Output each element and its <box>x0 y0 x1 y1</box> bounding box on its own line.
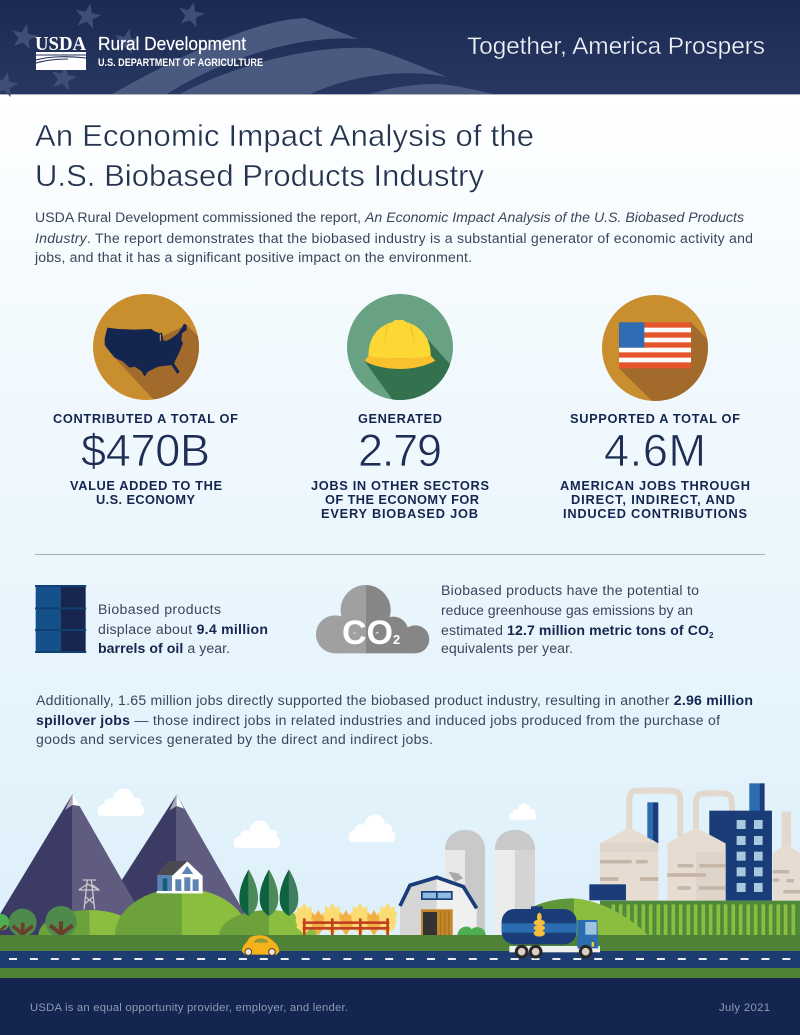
stat: 4.6M: AMERICAN JOBS THROUGH <box>560 478 750 493</box>
stat: $470B: $470B <box>81 425 210 476</box>
jobs paragraph: Additionally, 1.65 million jobs directly supported the biobased product industry, resulting in another 2.96 million <box>36 692 753 708</box>
oil displacement text <box>98 601 268 656</box>
mountains and hills <box>0 794 398 967</box>
barn <box>400 877 477 935</box>
icon: US map in orange circle <box>93 294 199 400</box>
icon: CO2 cloud: 2 <box>393 632 400 647</box>
greenhouse gas text: estimated 12.7 million metric tons of CO <box>441 622 709 638</box>
intro paragraph <box>34 209 753 265</box>
intro paragraph: jobs, and that it has a significant positive impact on the environment. <box>34 249 472 265</box>
agency name: Rural Development <box>98 33 246 54</box>
stat: 2.79: JOBS IN OTHER SECTORS <box>311 478 489 493</box>
stat: 4.6M: SUPPORTED A TOTAL OF <box>570 411 740 426</box>
stat: 2.79: 2.79 <box>358 425 442 476</box>
stat: 2.79: OF THE ECONOMY FOR <box>325 492 479 507</box>
stat: 2.79: GENERATED <box>358 411 442 426</box>
USDA logo <box>35 33 86 70</box>
jobs paragraph: spillover jobs — those indirect jobs in related industries and induced jobs produced from the purchase of <box>36 712 720 728</box>
stat: $470B: CONTRIBUTED A TOTAL OF <box>53 411 238 426</box>
greenhouse gas text: 2 <box>709 631 714 640</box>
fence <box>303 918 389 936</box>
stat: 4.6M: INDUCED CONTRIBUTIONS <box>563 506 747 521</box>
greenhouse gas text <box>441 582 714 656</box>
agency name: U.S. DEPARTMENT OF AGRICULTURE <box>98 57 263 69</box>
stat: 4.6M: 4.6M <box>604 425 706 476</box>
tanker truck <box>502 906 600 957</box>
icon: CO2 cloud <box>316 585 429 653</box>
agency name <box>98 33 263 69</box>
landscape illustration <box>0 783 800 978</box>
icon: oil barrel <box>35 585 86 653</box>
stat: 4.6M: DIRECT, INDIRECT, AND <box>571 492 735 507</box>
icon: American flag in orange circle <box>602 295 708 401</box>
title <box>35 118 534 193</box>
round trees <box>0 906 77 943</box>
intro paragraph: USDA Rural Development commissioned the report, An Economic Impact Analysis of the U.S. Biobased Products <box>35 209 744 225</box>
factory <box>589 783 800 901</box>
stat: $470B <box>53 411 238 507</box>
greenhouse gas text: Biobased products have the potential to <box>441 582 699 598</box>
jobs paragraph <box>36 692 753 747</box>
title: U.S. Biobased Products Industry <box>35 158 484 193</box>
ground and road <box>0 935 800 978</box>
jobs paragraph: goods and services generated by the direct and indirect jobs. <box>36 731 433 747</box>
USDA logo: USDA <box>35 33 86 55</box>
bushes <box>457 927 486 937</box>
greenhouse gas text: equivalents per year. <box>441 640 573 656</box>
crop field <box>600 901 800 936</box>
intro paragraph: Industry. The report demonstrates that the biobased industry is a substantial generator of economic activity and <box>35 230 753 246</box>
stat: 4.6M <box>560 411 750 521</box>
footer bar <box>0 978 800 1035</box>
transmission tower <box>79 880 99 909</box>
oil displacement text: barrels of oil a year. <box>98 640 230 656</box>
icon: CO2 cloud: CO <box>342 614 393 652</box>
silos, barn, factory, truck <box>400 783 800 937</box>
clouds <box>98 789 537 848</box>
header banner <box>0 0 800 98</box>
title: An Economic Impact Analysis of the <box>35 118 534 153</box>
stat: $470B: VALUE ADDED TO THE <box>70 478 222 493</box>
cypress trees <box>239 869 298 916</box>
stat: 2.79 <box>311 411 489 521</box>
tagline: Together, America Prospers <box>467 33 765 60</box>
flag stars and stripes <box>0 0 493 98</box>
greenhouse gas text: reduce greenhouse gas emissions by an <box>441 602 693 618</box>
green hill <box>533 898 574 936</box>
oil displacement text: Biobased products <box>98 601 221 617</box>
oil displacement text: displace about 9.4 million <box>98 621 268 637</box>
satellite dish <box>448 872 463 882</box>
icon: hard hat in green circle <box>347 294 453 400</box>
yellow car <box>242 935 279 955</box>
stat: 2.79: EVERY BIOBASED JOB <box>321 506 478 521</box>
footer bar: July 2021 <box>719 1002 770 1014</box>
stat: $470B: U.S. ECONOMY <box>96 492 195 507</box>
house <box>157 861 203 893</box>
footer bar: USDA is an equal opportunity provider, employer, and lender. <box>30 1002 348 1014</box>
wheat <box>294 903 398 936</box>
